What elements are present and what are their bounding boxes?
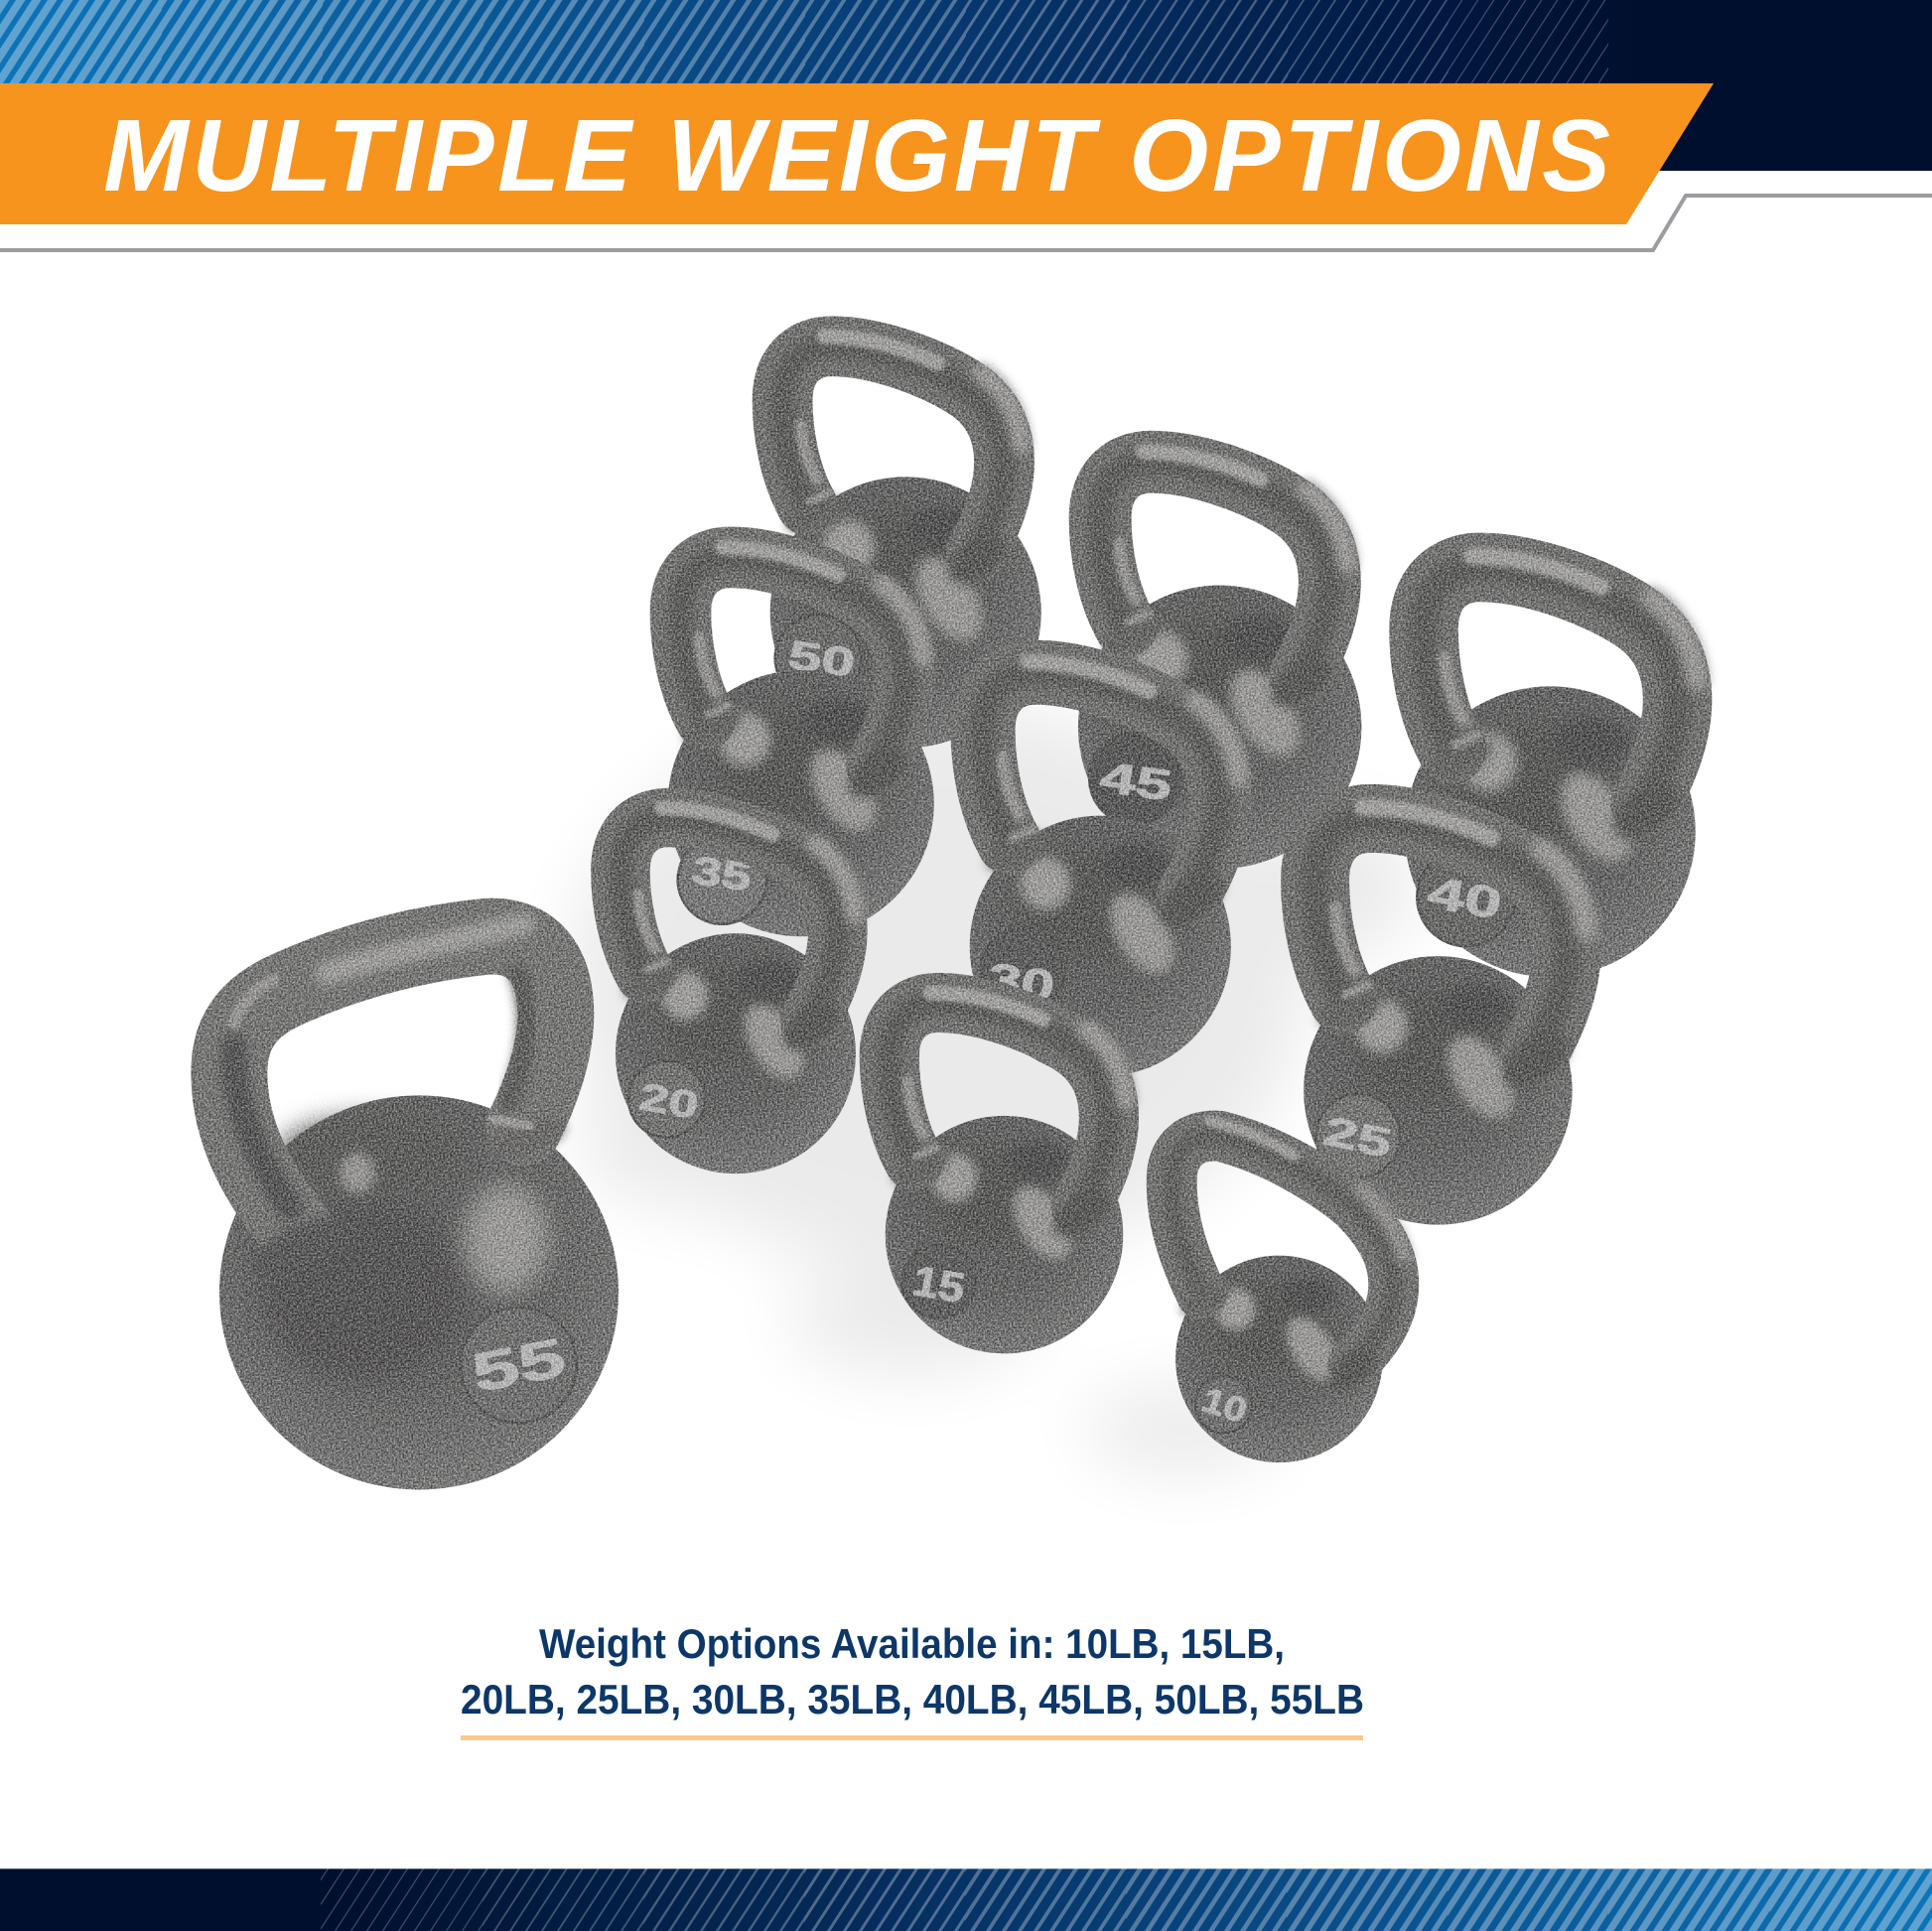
floor shadows (567, 702, 1417, 1472)
kettlebell 35: 35 (689, 849, 755, 900)
kettlebell 35 (668, 547, 934, 936)
footer band (0, 1868, 1932, 1931)
kettlebell 25: 25 (1319, 1108, 1396, 1167)
kettlebell 50 (770, 337, 1041, 748)
kettlebell group (219, 337, 1697, 1489)
kettlebell 20: 20 (636, 1075, 702, 1128)
kettlebell 45 (1078, 452, 1361, 869)
kettlebell 15 (886, 993, 1126, 1353)
kettlebell 55: 55 (467, 1326, 571, 1404)
caption text: 20LB, 25LB, 30LB, 35LB, 40LB, 45LB, 50LB, 55LB (461, 1676, 1364, 1723)
caption underline (461, 1735, 1363, 1740)
kettlebell 45: 45 (1097, 754, 1174, 811)
caption text: Weight Options Available in: 10LB, 15LB, (539, 1620, 1285, 1667)
kettlebell 55 (219, 924, 619, 1489)
kettlebell 10 (1172, 1121, 1405, 1462)
kettlebell 10: 10 (1197, 1381, 1251, 1431)
kettlebell 20 (616, 808, 856, 1173)
kettlebell 25 (1304, 807, 1587, 1225)
header band (0, 0, 1932, 250)
kettlebell 30: 30 (985, 955, 1057, 1011)
kettlebell 50: 50 (785, 631, 858, 686)
kettlebell 40: 40 (1424, 869, 1505, 929)
grey divider line (0, 196, 1932, 250)
kettlebell 30 (970, 662, 1239, 1077)
kettlebell 40 (1405, 556, 1697, 977)
caption text (461, 1620, 1364, 1723)
kettlebell 15: 15 (909, 1257, 968, 1311)
title banner: MULTIPLE WEIGHT OPTIONS (103, 98, 1610, 212)
